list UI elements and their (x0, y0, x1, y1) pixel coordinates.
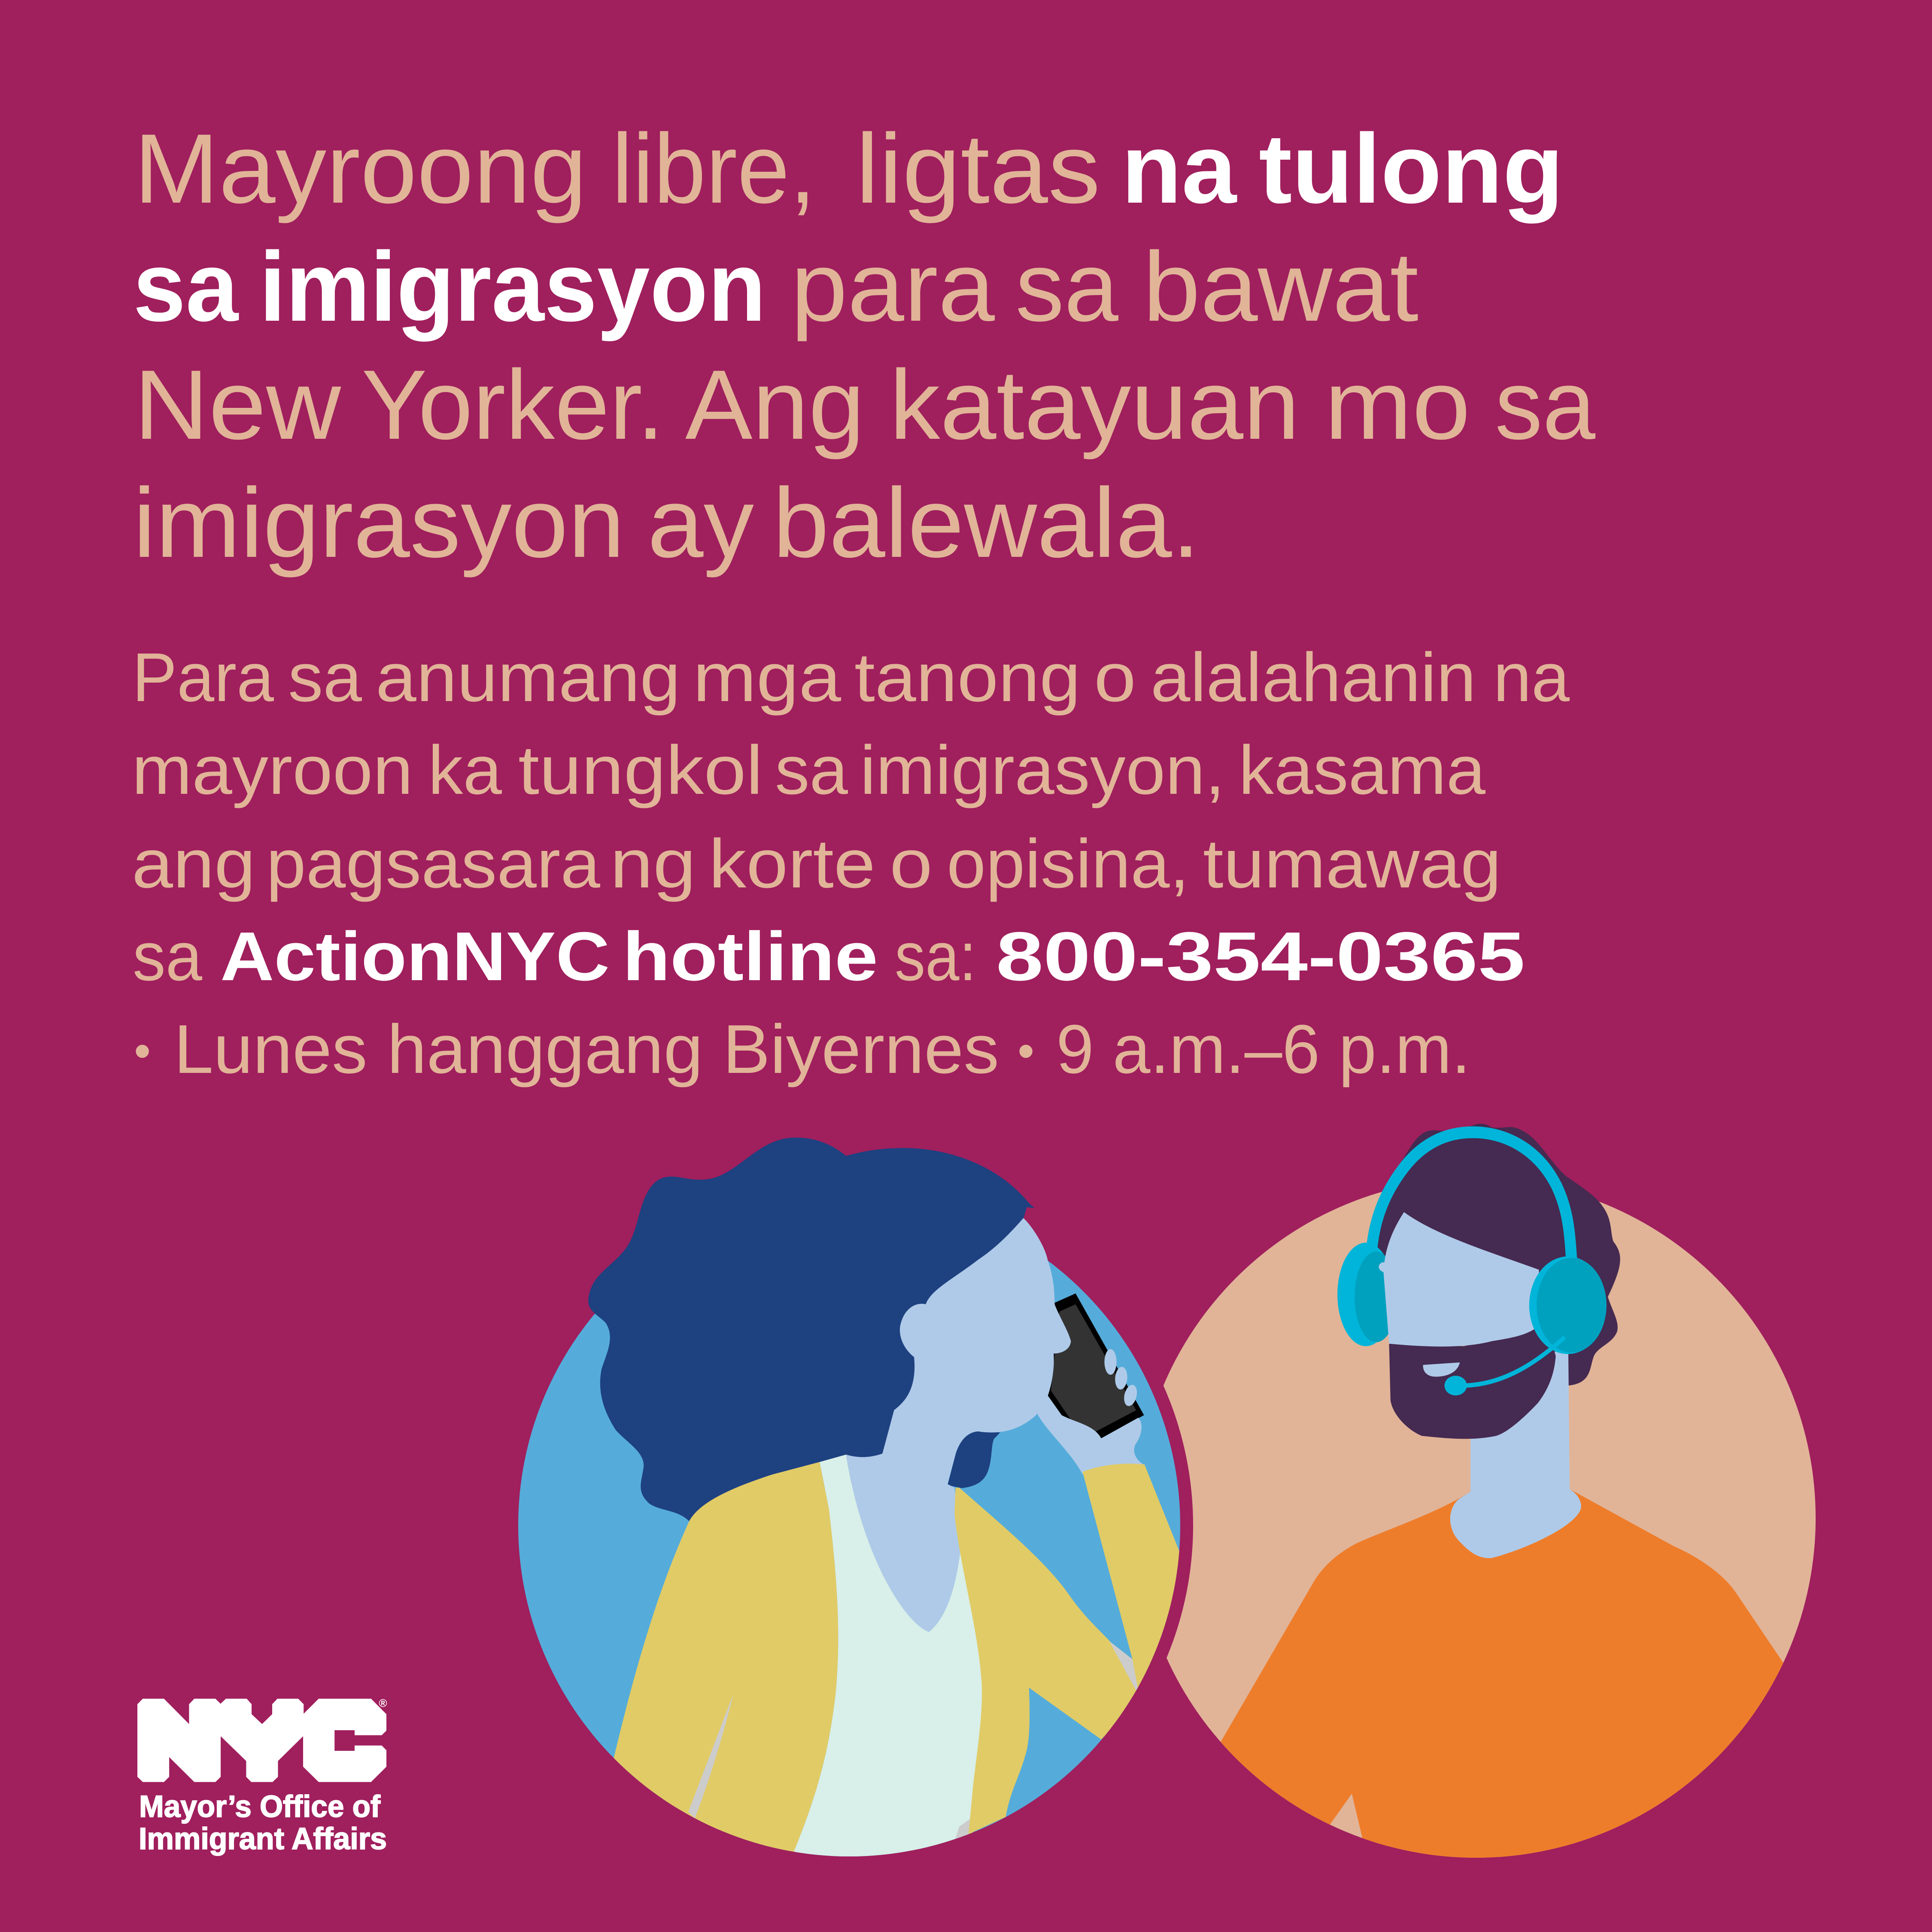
phone (1048, 1294, 1144, 1438)
gray lining (1109, 1641, 1142, 1692)
body line 1: alalahanin (1151, 639, 1476, 716)
body line 2: mayroon (132, 732, 413, 809)
heading line 1: libre, (612, 113, 816, 224)
heading line 2: bawat (1143, 231, 1419, 342)
body line 4: hotline and phone number: ActionNYC (220, 918, 610, 995)
body line 1: tanong (854, 639, 1081, 716)
NYC wordmark (137, 1699, 386, 1782)
body line 3: o (890, 825, 933, 902)
heading line 4: balewala. (773, 468, 1200, 578)
registered mark: ® (379, 1697, 387, 1710)
body line 5: hours: Lunes hanggang Biyernes (174, 1011, 999, 1088)
body line 3: ng (610, 825, 696, 902)
body line 1 (132, 639, 1570, 716)
man's neck and collar (1450, 1351, 1581, 1558)
hand (1037, 1395, 1145, 1474)
jacket left panel (614, 1462, 838, 1852)
body line 2: tungkol (518, 732, 763, 809)
mouth (1423, 1362, 1460, 1377)
body line 2: ka (428, 732, 502, 809)
body line 2: kasama (1239, 732, 1485, 809)
heading line 1 (134, 113, 1564, 224)
heading line 2: para (791, 231, 995, 342)
headband (1372, 1132, 1571, 1260)
body line 3 (132, 825, 1501, 902)
body line 3: pagsasara (266, 825, 600, 902)
body text (132, 639, 1570, 1088)
body line 4: hotline and phone number: hotline (623, 918, 878, 995)
logo text line 1: Mayor’s Office of (139, 1790, 380, 1824)
body line 5: hours: • (134, 1024, 151, 1078)
body line 4: hotline and phone number (133, 918, 1525, 995)
heading line 1: ligtas (856, 113, 1100, 224)
body line 1: anumang (376, 639, 680, 716)
logo: NYC Mayor's Office of Immigrant Affairs (137, 1697, 387, 1856)
body line 3: tumawag (1203, 825, 1501, 902)
shirt (794, 1455, 982, 1856)
heading line 3: New (134, 349, 341, 460)
body line 4: hotline and phone number: sa: (895, 918, 976, 995)
body line 2 (132, 732, 1485, 809)
body line 3: ang (132, 825, 255, 902)
heading (133, 113, 1595, 578)
body line 5: hours: • (1018, 1024, 1034, 1078)
illustration: call-centre man in peach circle (1163, 1124, 1816, 1858)
man's face (1383, 1212, 1539, 1346)
right ear cup (1529, 1257, 1607, 1354)
body line 3: opisina, (947, 825, 1189, 902)
heading line 2: sa (1015, 231, 1118, 342)
jacket sleeve (1082, 1464, 1192, 1691)
jacket right panel (954, 1488, 1143, 1834)
body line 3: korte (709, 825, 875, 902)
clothing clipped to circle (614, 1455, 1179, 1856)
beard (1389, 1331, 1556, 1439)
heading line 3: mo (1324, 349, 1470, 460)
body line 5: hours (134, 1011, 1470, 1088)
heading line 3 (134, 349, 1595, 460)
woman's hair (588, 1138, 1035, 1521)
body line 1: o (1094, 639, 1136, 716)
heading line 2 (133, 231, 1419, 342)
body line 2: sa (775, 732, 848, 809)
heading line 1: Mayroong (134, 113, 587, 224)
microphone (1444, 1337, 1564, 1395)
heading line 3: Yorker. (361, 349, 664, 460)
logo text line 2: Immigrant Affairs (139, 1822, 387, 1856)
man's hair (1375, 1124, 1620, 1385)
heading line 1: tulong (1259, 113, 1564, 224)
body line 2: imigrasyon, (860, 732, 1225, 809)
man figure (1337, 1124, 1620, 1558)
jacket fold (688, 1694, 733, 1818)
body line 4: hotline and phone number: 800-354-0365 (996, 918, 1525, 995)
heading line 3: katayuan (890, 349, 1300, 460)
heading line 1: na (1121, 113, 1237, 224)
body line 1: Para (132, 639, 274, 716)
heading line 2: sa (133, 231, 239, 342)
heading line 3: sa (1495, 349, 1595, 460)
ear (1379, 1262, 1409, 1273)
left ear cup (1337, 1242, 1397, 1346)
heading line 2: imigrasyon (259, 231, 766, 342)
body line 5: hours: 9 a.m.–6 p.m. (1056, 1011, 1470, 1088)
peach circle (1136, 1179, 1816, 1858)
blue circle (518, 1194, 1180, 1856)
heading line 4 (133, 468, 1200, 578)
hair behind neck (948, 1431, 1000, 1488)
woman figure (588, 1138, 1145, 1632)
heading line 4: imigrasyon (133, 468, 625, 578)
body line 1: mga (693, 639, 841, 716)
orange t-shirt (1221, 1489, 1783, 1858)
gray hem (954, 1818, 971, 1844)
body line 1: na (1493, 639, 1570, 716)
body line 4: hotline and phone number: sa (133, 918, 202, 995)
heading line 3: Ang (685, 349, 865, 460)
heading line 4: ay (647, 468, 754, 578)
illustration: woman on phone in blue circle (518, 1138, 1192, 1883)
separating ring (505, 1182, 1193, 1869)
woman's skin (846, 1218, 1071, 1632)
body line 1: sa (288, 639, 362, 716)
fingers (1104, 1349, 1139, 1408)
